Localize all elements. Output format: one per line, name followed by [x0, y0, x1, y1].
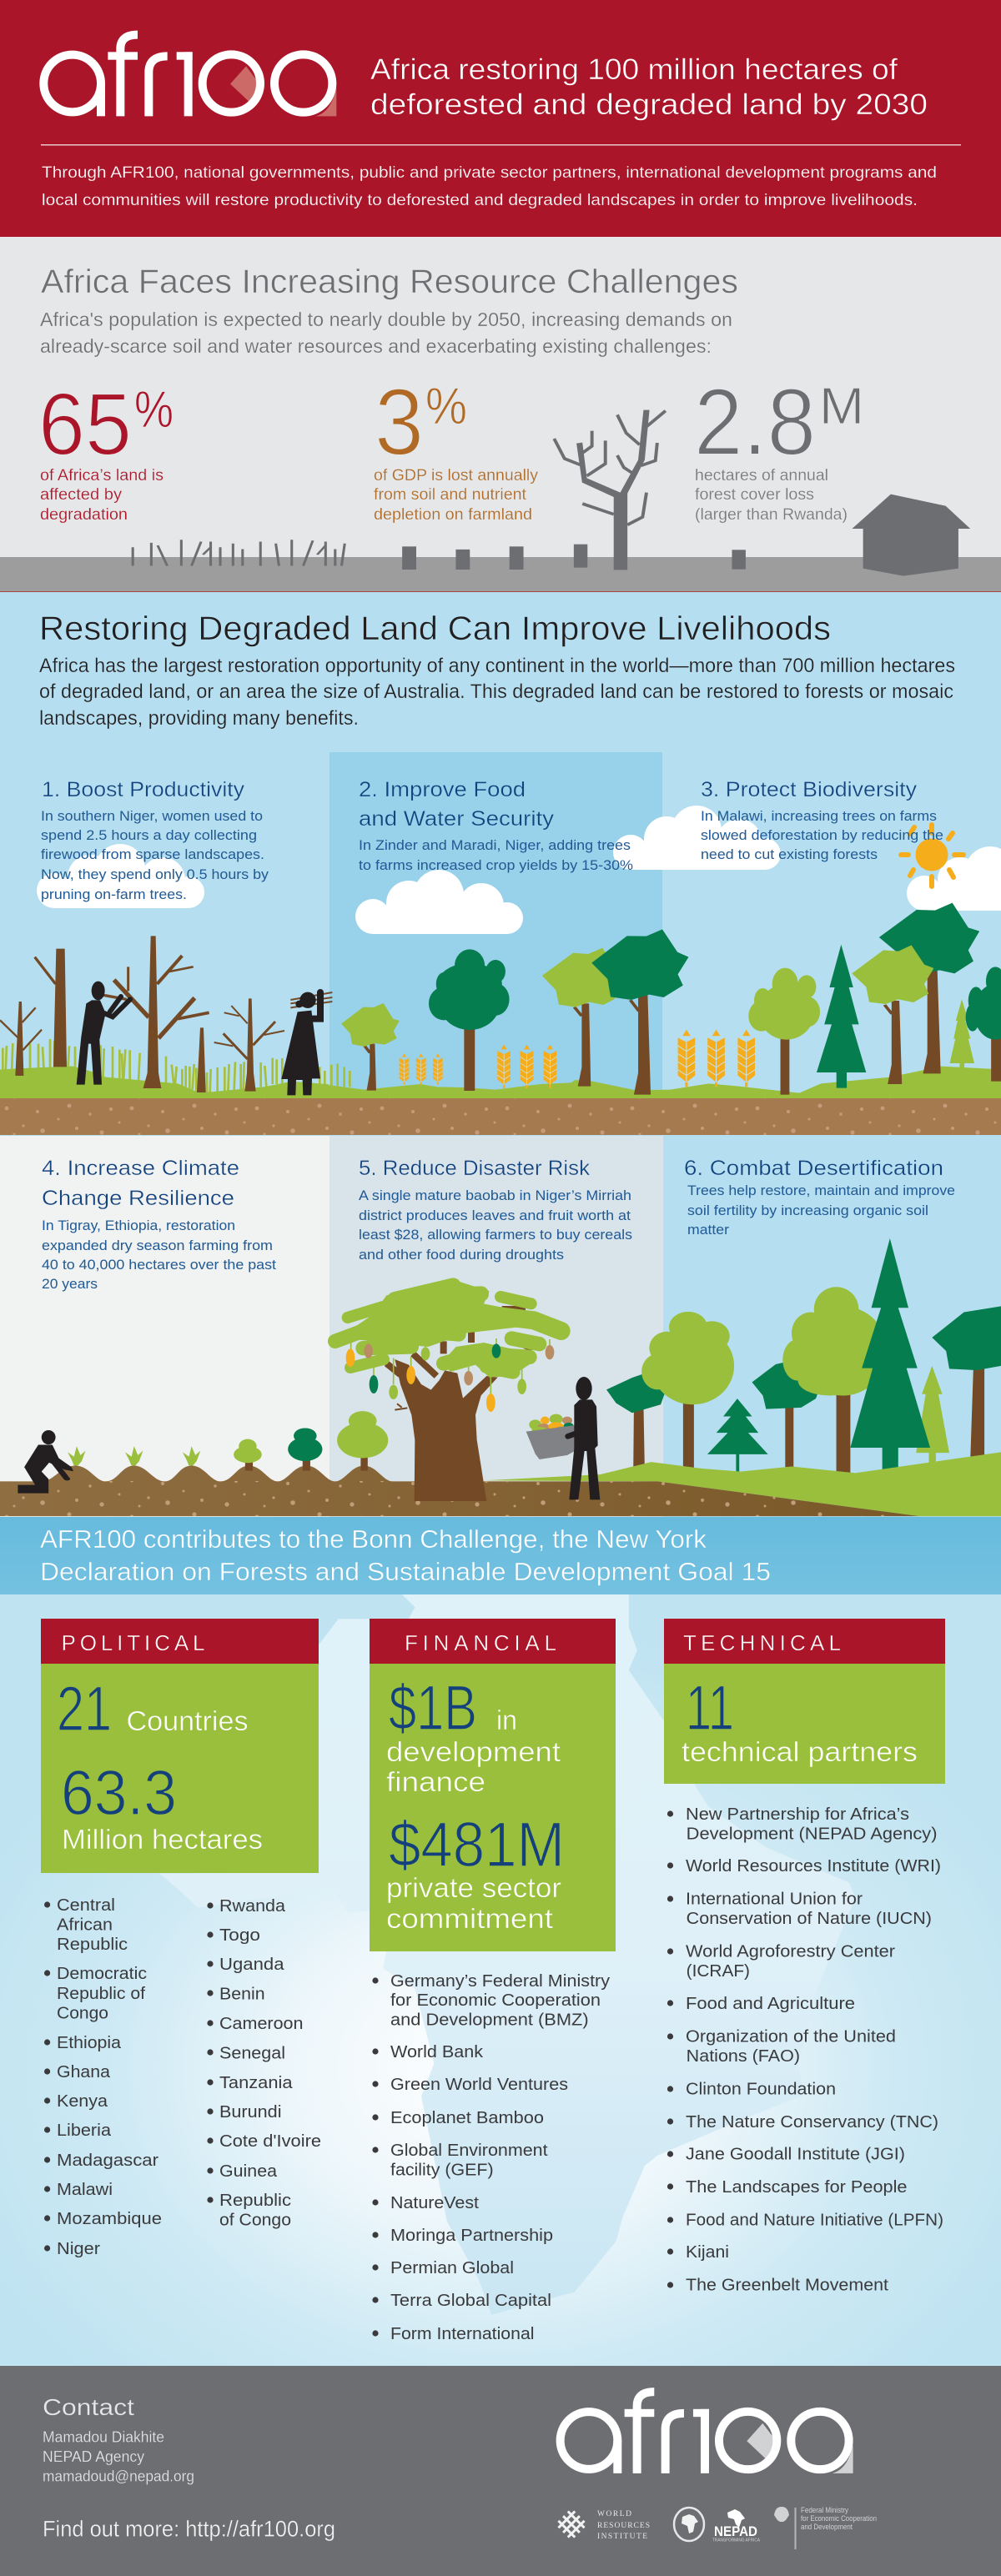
- list: political countries: Republic of: [57, 1985, 145, 2003]
- list: financial partners: for Economic Cooperation: [390, 1991, 601, 2010]
- icon: sun: [901, 825, 963, 886]
- stat: 63.3 million hectares: Million hectares: [62, 1824, 263, 1855]
- list: political countries: Liberia: [57, 2122, 112, 2140]
- list: technical partners: Clinton Foundation: [686, 2080, 836, 2098]
- list: financial partners: Ecoplanet Bamboo: [390, 2109, 544, 2127]
- logo: German Federal Ministry: [774, 2506, 877, 2549]
- benefit 3: protect biodiversity: 3. Protect Biodiversity: [701, 778, 918, 801]
- header intro text: Through AFR100, national governments, public and private sector partners, international development programs and: [42, 163, 937, 182]
- banner: Bonn Challenge: Declaration on Forests and Sustainable Development Goal 15: [40, 1557, 771, 1586]
- list: financial partners: Green World Ventures: [390, 2076, 568, 2094]
- stat: 2.8M: forest cover loss: [695, 486, 814, 504]
- list: technical partners: [667, 1805, 943, 2295]
- list: financial partners: World Bank: [390, 2043, 484, 2061]
- label: financial: FINANCIAL: [405, 1630, 556, 1655]
- contact details: NEPAD Agency: [43, 2448, 144, 2465]
- list: political countries: Kenya: [57, 2092, 108, 2111]
- list: technical partners: Jane Goodall Institute (JGI): [686, 2146, 905, 2164]
- benefit 6: combat desertification: 6. Combat Desertification: [684, 1157, 943, 1180]
- stat: 21 countries: 21: [57, 1674, 112, 1745]
- illustration: forest trees on the right: [606, 1238, 1001, 1478]
- list: financial partners: Global Environment: [390, 2142, 548, 2160]
- stat: 11 technical partners: [682, 1673, 918, 1767]
- list: technical partners: Kijani: [686, 2243, 729, 2262]
- stat: 481M private sector commitment: $481M: [389, 1810, 565, 1881]
- intro text: of degraded land, or an area the size of Australia. This degraded land can be restored to forests or mosaic: [39, 680, 953, 703]
- benefit 4: increase climate change resilience: In Tigray, Ethiopia, restoration: [42, 1218, 235, 1233]
- illustration: man with basket of fruit: [526, 1377, 600, 1499]
- benefit 6: combat desertification: soil fertility by increasing organic soil: [687, 1203, 928, 1218]
- link: find out more: Find out more: http://afr100.org: [43, 2517, 335, 2542]
- illustration: degraded trees: [0, 936, 284, 1092]
- list: political countries: Niger: [57, 2240, 100, 2258]
- logo: NEPAD: NEPAD: [714, 2523, 757, 2539]
- stat: 21 countries: [57, 1674, 249, 1745]
- list: financial partners: and Development (BMZ): [390, 2011, 589, 2030]
- benefit 4: increase climate change resilience: expanded dry season farming from: [42, 1238, 273, 1253]
- list: political countries: Togo: [219, 1926, 260, 1945]
- stat: 65 percent: affected by: [40, 486, 123, 504]
- list: technical partners: Development (NEPAD Agency): [687, 1825, 938, 1843]
- stat: 481M private sector commitment: [386, 1810, 565, 1934]
- panel: footer: [0, 2366, 1001, 2576]
- list: political countries: Tanzania: [219, 2074, 293, 2092]
- benefit 2: improve food and water security: [359, 778, 633, 873]
- logo: NEPAD: TRANSFORMING AFRICA: [712, 2538, 761, 2543]
- heading: Africa faces increasing resource challenges: Africa Faces Increasing Resource Challenges: [41, 264, 738, 300]
- stat: 1B development finance: development: [386, 1736, 561, 1767]
- list: technical partners: World Agroforestry Center: [686, 1943, 895, 1961]
- clouds: [37, 806, 1001, 934]
- list: political countries: Madagascar: [57, 2152, 158, 2170]
- logo: World Resources Institute: [555, 2508, 650, 2541]
- list: technical partners: Food and Nature Initiative (LPFN): [686, 2212, 943, 2230]
- intro text: landscapes, providing many benefits.: [39, 707, 359, 730]
- ground: soil mounds and green slope: [0, 1452, 1001, 1516]
- stat: 3 percent: of GDP is lost annually: [374, 467, 539, 485]
- stat: 2.8M: [694, 369, 864, 524]
- list: political countries: Guinea: [219, 2162, 278, 2181]
- list: political countries: Rwanda: [219, 1897, 286, 1916]
- benefit 2: improve food and water security: 2. Improve Food: [359, 778, 526, 801]
- logo: NEPAD: [712, 2509, 761, 2543]
- benefit 4: increase climate change resilience: [42, 1157, 276, 1292]
- list: political countries: Congo: [57, 2005, 108, 2023]
- list: technical partners: The Landscapes for People: [686, 2178, 908, 2197]
- contact details: Contact: [43, 2394, 134, 2420]
- banner: Bonn Challenge: AFR100 contributes to the Bonn Challenge, the New York: [40, 1524, 707, 1554]
- illustration: woman carrying firewood: [281, 992, 332, 1095]
- illustration: baobab tree with fruit: [334, 1282, 561, 1501]
- stat: 2.8M: 2.8: [694, 369, 816, 475]
- stat: 1B development finance: [386, 1673, 561, 1797]
- benefit 6: combat desertification: matter: [687, 1222, 729, 1238]
- list: political countries: Ghana: [57, 2063, 111, 2081]
- header title: Africa restoring 100 million hectares of: [370, 53, 898, 86]
- benefit 2: improve food and water security: and Water Security: [359, 807, 555, 831]
- list: financial partners: Form International: [390, 2325, 534, 2343]
- list: political countries: Republic: [219, 2192, 291, 2210]
- header intro text: [42, 163, 937, 209]
- illustration: farmer kneeling with seedlings and saplings: [18, 1411, 388, 1494]
- logo: afr100 header: [43, 35, 336, 116]
- logo: World Resources Institute: INSTITUTE: [597, 2533, 647, 2541]
- stat: 2.8M: M: [819, 378, 864, 435]
- stat: 2.8M: hectares of annual: [695, 467, 828, 485]
- benefit 5: reduce disaster risk: A single mature baobab in Niger’s Mirriah: [359, 1188, 631, 1203]
- list: political countries: Benin: [219, 1986, 265, 2004]
- stat: 2.8M: (larger than Rwanda): [695, 506, 848, 524]
- card: financial: [370, 1619, 616, 1951]
- logo: afr100 footer: [561, 2392, 853, 2473]
- contact details: [43, 2394, 194, 2485]
- list: political countries: of Congo: [219, 2212, 291, 2230]
- benefit 3: protect biodiversity: need to cut existing forests: [701, 846, 878, 862]
- list: political countries: Central: [57, 1896, 115, 1915]
- stat: 3 percent: [374, 369, 539, 524]
- benefit 5: reduce disaster risk: district produces leaves and fruit worth at: [359, 1208, 631, 1223]
- benefit 5: reduce disaster risk: least $28, allowing farmers to buy cereals: [359, 1227, 632, 1243]
- list: political countries: Republic: [57, 1936, 128, 1954]
- label: political: POLITICAL: [62, 1630, 205, 1655]
- benefit 1: boost productivity: Now, they spend only 0.5 hours by: [41, 866, 269, 882]
- list: financial partners: [372, 1972, 610, 2343]
- card: technical: [664, 1619, 945, 1784]
- benefit 3: protect biodiversity: In Malawi, increasing trees on farms: [701, 808, 937, 824]
- illustration: man pruning tree: [77, 982, 130, 1085]
- stat: 1B development finance: finance: [386, 1766, 485, 1797]
- list: technical partners: Organization of the United: [686, 2028, 896, 2046]
- list: technical partners: International Union for: [686, 1891, 863, 1909]
- stat: 3 percent: 3: [375, 369, 424, 475]
- list: financial partners: Moringa Partnership: [390, 2227, 553, 2245]
- benefit 3: protect biodiversity: [701, 778, 943, 862]
- stat: 65 percent: [38, 375, 174, 524]
- panel: header: [0, 0, 1001, 237]
- illustration: stumps and thin sticks: [133, 540, 524, 570]
- benefit 2: improve food and water security: In Zinder and Maradi, Niger, adding trees: [359, 837, 631, 853]
- benefit 1: boost productivity: spend 2.5 hours a day collecting: [41, 827, 257, 843]
- list: technical partners: New Partnership for Africa’s: [686, 1805, 909, 1824]
- benefit 5: reduce disaster risk: 5. Reduce Disaster Risk: [359, 1157, 591, 1180]
- benefit 4: increase climate change resilience: Change Resilience: [42, 1187, 234, 1210]
- list: political countries: Uganda: [219, 1956, 284, 1974]
- list: political countries: Burundi: [219, 2103, 282, 2122]
- ground: green hills and soil: [0, 1067, 1001, 1135]
- header title: [370, 53, 928, 121]
- intro text: [40, 309, 732, 357]
- list: financial partners: facility (GEF): [390, 2162, 494, 2180]
- benefit 5: reduce disaster risk: [359, 1157, 632, 1263]
- intro text: already-scarce soil and water resources and exacerbating existing challenges:: [40, 335, 712, 357]
- benefit 5: reduce disaster risk: and other food during droughts: [359, 1247, 564, 1263]
- list: political countries: [44, 1896, 321, 2258]
- benefit 1: boost productivity: [41, 778, 269, 902]
- list: political countries: Senegal: [219, 2045, 285, 2063]
- stat: 481M private sector commitment: commitment: [386, 1903, 553, 1934]
- benefit 2: improve food and water security: to farms increased crop yields by 15-30%: [359, 857, 633, 873]
- stat: 3 percent: from soil and nutrient: [374, 486, 527, 504]
- benefit 4: increase climate change resilience: 20 years: [42, 1276, 98, 1292]
- benefit 3: protect biodiversity: slowed deforestation by reducing the: [701, 827, 943, 843]
- heading: restoring degraded land can improve livelihoods: Restoring Degraded Land Can Improve Livelihoods: [39, 610, 831, 647]
- stat: 1B development finance: $1B: [389, 1673, 477, 1744]
- list: political countries: Cameroon: [219, 2015, 304, 2033]
- intro text: Africa has the largest restoration opportunity of any continent in the world—more than 700 million hectares: [39, 655, 955, 677]
- list: financial partners: Terra Global Capital: [390, 2292, 551, 2310]
- stat: 65 percent: 65: [38, 375, 132, 474]
- list: technical partners: World Resources Institute (WRI): [686, 1857, 941, 1876]
- card: political: [41, 1619, 319, 1873]
- benefit 1: boost productivity: 1. Boost Productivity: [42, 778, 245, 801]
- benefit 4: increase climate change resilience: 4. Increase Climate: [42, 1157, 239, 1180]
- list: political countries: Democratic: [57, 1965, 147, 1983]
- stat: 11 technical partners: technical partners: [682, 1736, 918, 1767]
- benefit 1: boost productivity: In southern Niger, women used to: [41, 808, 263, 824]
- logo: African Union emblem: [674, 2508, 704, 2541]
- stat: 481M private sector commitment: private sector: [386, 1872, 561, 1903]
- list: political countries: Mozambique: [57, 2210, 162, 2228]
- logo: World Resources Institute: WORLD: [597, 2510, 631, 2518]
- banner: Bonn Challenge: [0, 1517, 1001, 1594]
- stat: 63.3 million hectares: [61, 1758, 263, 1855]
- list: technical partners: The Greenbelt Movement: [686, 2277, 888, 2295]
- intro text: Africa's population is expected to nearly double by 2050, increasing demands on: [40, 309, 732, 330]
- stat: 65 percent: of Africa’s land is: [40, 467, 163, 485]
- grass: [3, 1039, 350, 1092]
- list: political countries: Cote d'Ivoire: [219, 2132, 321, 2151]
- list: technical partners: Food and Agriculture: [686, 1995, 855, 2013]
- list: financial partners: Germany’s Federal Ministry: [390, 1972, 610, 1991]
- panel: restoring degraded land: [0, 592, 1001, 1136]
- stat: 3 percent: depletion on farmland: [374, 506, 532, 524]
- label: technical: TECHNICAL: [683, 1630, 841, 1655]
- panel: resource challenges: [0, 237, 1001, 592]
- panel: partners background with Africa map: [0, 1594, 1001, 2366]
- logo: German Federal Ministry: and Development: [801, 2523, 853, 2531]
- list: political countries: Ethiopia: [57, 2034, 122, 2052]
- list: financial partners: NatureVest: [390, 2194, 479, 2212]
- list: political countries: African: [57, 1916, 113, 1935]
- list: technical partners: Conservation of Nature (IUCN): [687, 1910, 932, 1928]
- benefit 1: boost productivity: pruning on-farm trees.: [41, 886, 187, 902]
- panel: benefits 4 to 6: [0, 1136, 1001, 1517]
- header title: deforested and degraded land by 2030: [370, 88, 928, 121]
- logo: German Federal Ministry: for Economic Cooperation: [801, 2514, 877, 2523]
- list: technical partners: Nations (FAO): [687, 2047, 800, 2066]
- contact details: Mamadou Diakhite: [43, 2429, 164, 2446]
- benefit 6: combat desertification: Trees help restore, maintain and improve: [687, 1183, 955, 1198]
- benefit 6: combat desertification: [684, 1157, 955, 1238]
- stat: 65 percent: %: [134, 381, 174, 439]
- list: technical partners: (ICRAF): [687, 1962, 750, 1981]
- contact details: mamadoud@nepad.org: [43, 2468, 194, 2485]
- intro text: [39, 655, 955, 730]
- benefit 1: boost productivity: firewood from sparse landscapes.: [41, 846, 264, 862]
- logo: World Resources Institute: RESOURCES: [597, 2522, 650, 2530]
- list: technical partners: The Nature Conservancy (TNC): [686, 2113, 938, 2132]
- stat: 63.3 million hectares: 63.3: [61, 1758, 177, 1829]
- illustration: dead tree, stumps and house: [554, 410, 970, 576]
- header intro text: local communities will restore productivity to deforested and degraded landscapes in order to improve livelihoods.: [42, 191, 918, 209]
- logo: German Federal Ministry: Federal Ministry: [801, 2506, 848, 2514]
- stat: 1B development finance: in: [496, 1705, 517, 1735]
- stat: 21 countries: Countries: [127, 1705, 249, 1736]
- list: political countries: Malawi: [57, 2181, 113, 2199]
- benefit 4: increase climate change resilience: 40 to 40,000 hectares over the past: [42, 1257, 276, 1273]
- stat: 65 percent: degradation: [40, 506, 128, 524]
- list: financial partners: Permian Global: [390, 2259, 514, 2277]
- illustration: restored trees and crops: [341, 903, 1001, 1095]
- stat: 3 percent: %: [425, 378, 467, 435]
- stat: 11 technical partners: 11: [686, 1673, 734, 1744]
